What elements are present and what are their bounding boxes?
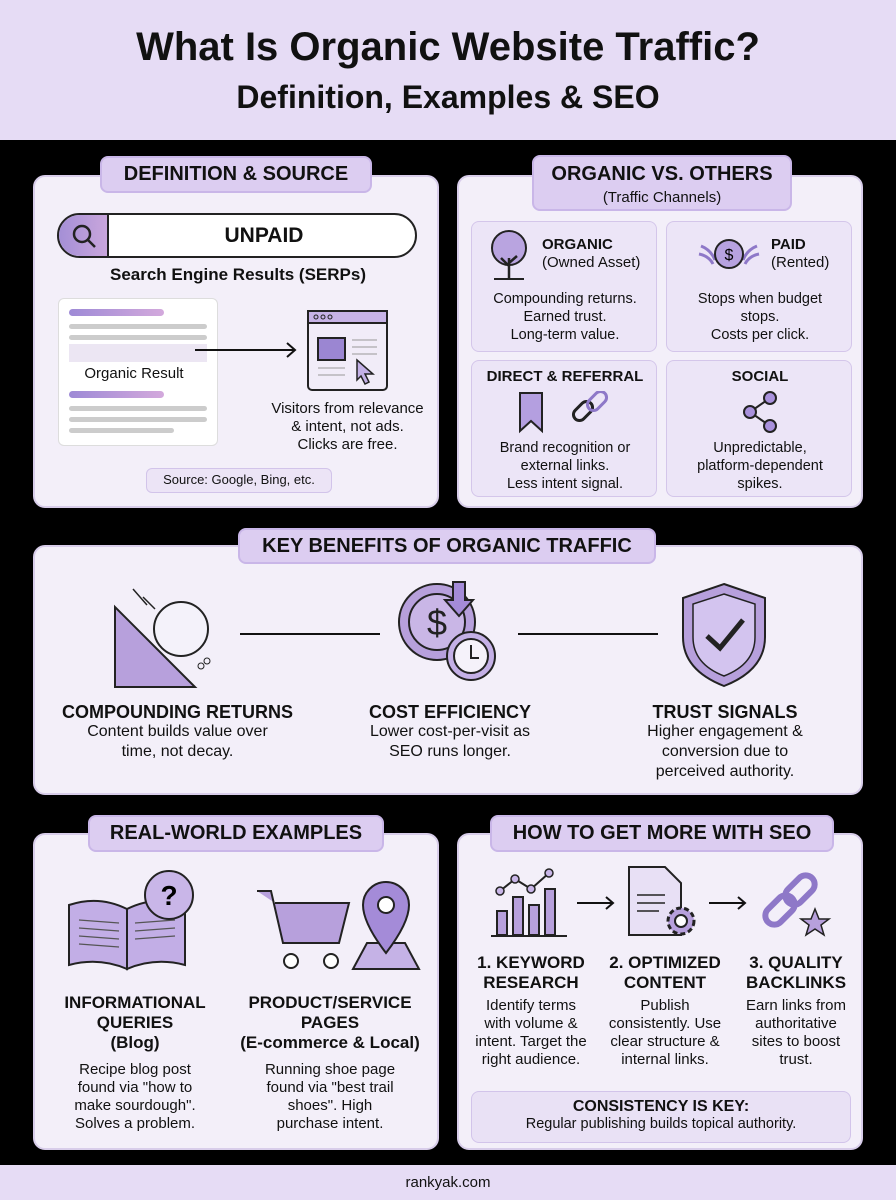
text: visitors: Visitors from relevance xyxy=(271,400,424,417)
tab: organic vs others xyxy=(532,155,792,211)
example: informational: found via "how to xyxy=(78,1079,192,1096)
text: visitors xyxy=(271,400,424,453)
step 1: intent. Target the xyxy=(475,1033,587,1050)
step 3: authoritative xyxy=(755,1015,837,1032)
panel: organic vs others xyxy=(457,175,863,508)
example: product: purchase intent. xyxy=(277,1115,383,1132)
tab: seo xyxy=(490,815,834,852)
tab: organic vs others: ORGANIC VS. OTHERS xyxy=(551,163,773,185)
tab: examples: REAL-WORLD EXAMPLES xyxy=(110,822,362,844)
arrow xyxy=(577,896,614,910)
benefit: compounding: Content builds value over xyxy=(87,723,268,740)
card: paid xyxy=(666,221,852,352)
icon: shield xyxy=(682,583,766,688)
tab: definition xyxy=(100,156,372,193)
example: informational: (Blog) xyxy=(110,1033,160,1052)
card: direct & referral xyxy=(471,360,657,497)
example: product: (E-commerce & Local) xyxy=(240,1033,420,1052)
icon: browser xyxy=(307,310,388,391)
card: organic: Earned trust. xyxy=(523,309,606,325)
example: informational: QUERIES xyxy=(97,1013,173,1032)
card: organic: Compounding returns. xyxy=(493,291,637,307)
connector xyxy=(240,633,380,635)
card: social: spikes. xyxy=(737,476,783,492)
tab: seo: HOW TO GET MORE WITH SEO xyxy=(513,822,811,844)
benefit: trust: conversion due to xyxy=(662,743,788,760)
card: social: SOCIAL xyxy=(732,368,788,385)
subtitle: Definition, Examples & SEO xyxy=(236,79,660,115)
icon: chart xyxy=(491,868,567,937)
icon: book: ? xyxy=(160,880,178,911)
example: product: Running shoe page xyxy=(265,1061,395,1078)
step 2: internal links. xyxy=(621,1051,709,1068)
step 2 xyxy=(609,953,721,1068)
example: informational: make sourdough". xyxy=(74,1097,196,1114)
benefit: cost xyxy=(369,702,531,760)
card: paid: $ xyxy=(725,247,734,264)
benefit: trust: perceived authority. xyxy=(656,763,794,780)
benefit: compounding: COMPOUNDING RETURNS xyxy=(62,702,293,722)
card: social: platform-dependent xyxy=(697,458,823,474)
card: paid: (Rented) xyxy=(771,254,829,271)
benefit: trust: TRUST SIGNALS xyxy=(652,702,798,722)
panel: how to get more with seo xyxy=(457,833,863,1150)
step 1: with volume & xyxy=(484,1015,578,1032)
serp card xyxy=(58,298,218,446)
example: product: shoes". High xyxy=(288,1097,372,1114)
step 3: trust. xyxy=(779,1051,813,1068)
text: visitors: Clicks are free. xyxy=(297,436,398,453)
card: paid: PAID xyxy=(771,236,806,253)
panel: key benefits xyxy=(33,545,863,795)
step 3: Earn links from xyxy=(746,997,846,1014)
callout: consistency: CONSISTENCY IS KEY: xyxy=(573,1098,749,1115)
example: product: found via "best trail xyxy=(266,1079,394,1096)
footer: rankyak.com xyxy=(405,1174,491,1191)
card: organic: ORGANIC xyxy=(542,236,613,253)
benefit: trust: Higher engagement & xyxy=(647,723,803,740)
icon: link star xyxy=(762,872,832,937)
benefit: cost: COST EFFICIENCY xyxy=(369,702,531,722)
card: direct & referral: Less intent signal. xyxy=(507,476,623,492)
step 2: clear structure & xyxy=(610,1033,720,1050)
card: paid: Costs per click. xyxy=(711,327,809,343)
step 3 xyxy=(746,953,846,1068)
serp card: Organic Result xyxy=(84,365,184,382)
benefit: cost: Lower cost-per-visit as xyxy=(370,723,530,740)
source pill xyxy=(146,468,332,493)
callout: consistency: Regular publishing builds topical authority. xyxy=(526,1116,796,1132)
source pill: Source: Google, Bing, etc. xyxy=(163,472,315,487)
step 1: right audience. xyxy=(482,1051,580,1068)
connector xyxy=(518,633,658,635)
step 1: RESEARCH xyxy=(483,973,579,992)
example: product: PRODUCT/SERVICE xyxy=(248,993,412,1012)
benefit: trust xyxy=(647,702,803,780)
step 2: CONTENT xyxy=(624,973,706,992)
example: informational: Recipe blog post xyxy=(79,1061,191,1078)
step 2: consistently. Use xyxy=(609,1015,721,1032)
search bar: UNPAID xyxy=(225,224,303,247)
example: informational: INFORMATIONAL xyxy=(64,993,206,1012)
text: visitors: & intent, not ads. xyxy=(291,418,404,435)
step 2: Publish xyxy=(640,997,690,1014)
card: direct & referral: DIRECT & REFERRAL xyxy=(487,368,643,385)
benefit: compounding: time, not decay. xyxy=(122,743,233,760)
example: product: PAGES xyxy=(301,1013,359,1032)
card: social: Unpredictable, xyxy=(713,440,807,456)
card: social xyxy=(666,360,852,497)
panel: definition & source xyxy=(33,175,439,508)
header xyxy=(0,0,896,140)
card: direct & referral: external links. xyxy=(521,458,609,474)
step 1 xyxy=(475,953,587,1068)
step 3: BACKLINKS xyxy=(746,973,846,992)
arrow xyxy=(195,342,296,358)
title: What Is Organic Website Traffic? xyxy=(136,25,760,69)
example: informational: Solves a problem. xyxy=(75,1115,195,1132)
card: organic xyxy=(471,221,657,352)
example: product xyxy=(240,993,420,1132)
SERP label: Search Engine Results (SERPs) xyxy=(110,265,366,284)
example: informational xyxy=(64,993,206,1132)
tab: organic vs others: (Traffic Channels) xyxy=(603,189,721,206)
footer xyxy=(0,1165,896,1200)
search bar xyxy=(57,213,417,258)
step 1: 1. KEYWORD xyxy=(477,953,585,972)
icon: snowball xyxy=(114,588,210,688)
card: direct & referral: Brand recognition or xyxy=(500,440,630,456)
icon: cost: $ xyxy=(427,602,447,643)
step 3: sites to boost xyxy=(752,1033,840,1050)
arrow xyxy=(709,896,746,910)
tab: examples xyxy=(88,815,384,852)
step 3: 3. QUALITY xyxy=(749,953,843,972)
callout: consistency xyxy=(471,1091,851,1143)
icon: cart & pin xyxy=(257,881,421,970)
step 2: 2. OPTIMIZED xyxy=(609,953,721,972)
icon: document gear xyxy=(628,866,696,936)
card: organic: Long-term value. xyxy=(511,327,619,343)
tab: key benefits xyxy=(238,528,656,564)
card: organic: (Owned Asset) xyxy=(542,254,640,271)
card: paid: stops. xyxy=(741,309,779,325)
benefit: cost: SEO runs longer. xyxy=(389,743,511,760)
tab: definition: DEFINITION & SOURCE xyxy=(124,163,348,185)
icon: cost xyxy=(398,581,496,681)
panel: real-world examples xyxy=(33,833,439,1150)
benefit: compounding xyxy=(62,702,293,760)
tab: key benefits: KEY BENEFITS OF ORGANIC TRAFFIC xyxy=(262,535,632,557)
card: paid: Stops when budget xyxy=(698,291,822,307)
step 1: Identify terms xyxy=(486,997,576,1014)
icon: book xyxy=(68,870,194,970)
